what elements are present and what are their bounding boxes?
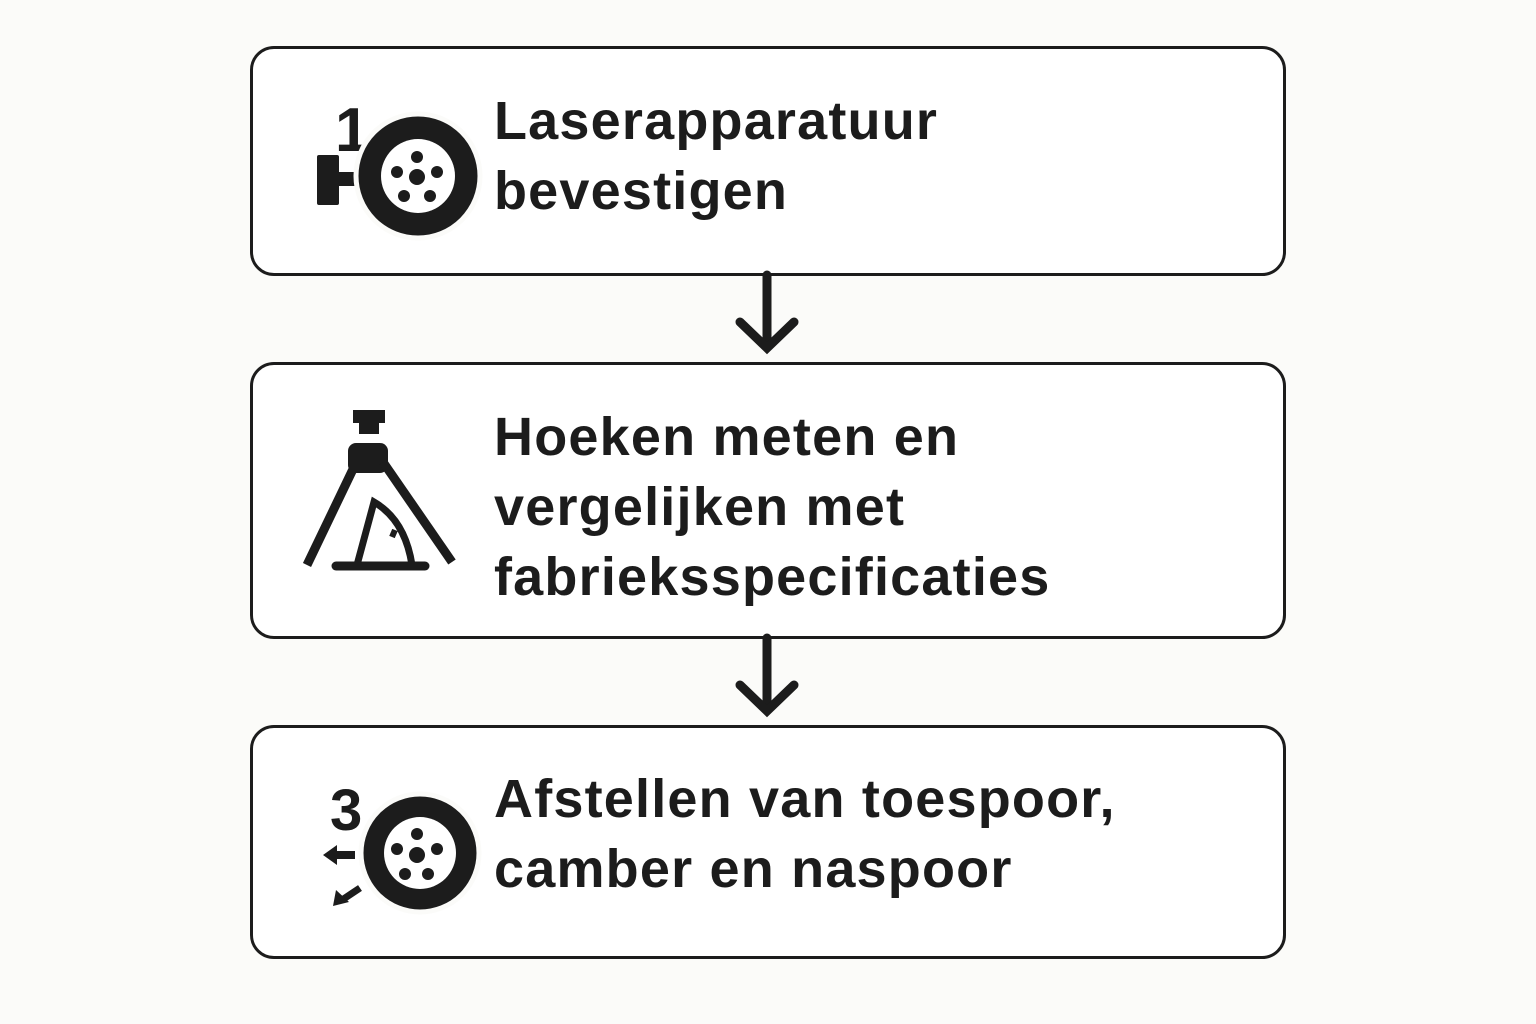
panel: step 1 [250, 46, 1286, 276]
panel: step 2 [250, 362, 1286, 639]
text: step 3: Afstellen van toespoor, [494, 769, 1116, 829]
text: step 2: Hoeken meten en [494, 407, 959, 467]
arrow 2 [740, 638, 794, 711]
icon: compass / angle meter [307, 410, 452, 566]
text: step 2 [494, 407, 1050, 607]
text: step 3 [494, 769, 1116, 899]
icon: laser on wheel: 1 [335, 96, 369, 165]
text: step 1: Laserapparatuur [494, 91, 938, 151]
arrow 1 [740, 275, 794, 348]
text: step 1 [494, 91, 938, 221]
text: step 2: vergelijken met [494, 477, 905, 537]
icon: laser on wheel [317, 96, 480, 238]
panel: step 3 [250, 725, 1286, 959]
icon: adjustment wheel [323, 778, 479, 912]
text: step 1: bevestigen [494, 161, 788, 221]
text: step 3: camber en naspoor [494, 839, 1013, 899]
text: step 2: fabrieksspecificaties [494, 547, 1050, 607]
icon: adjustment wheel: 3 [330, 778, 362, 843]
